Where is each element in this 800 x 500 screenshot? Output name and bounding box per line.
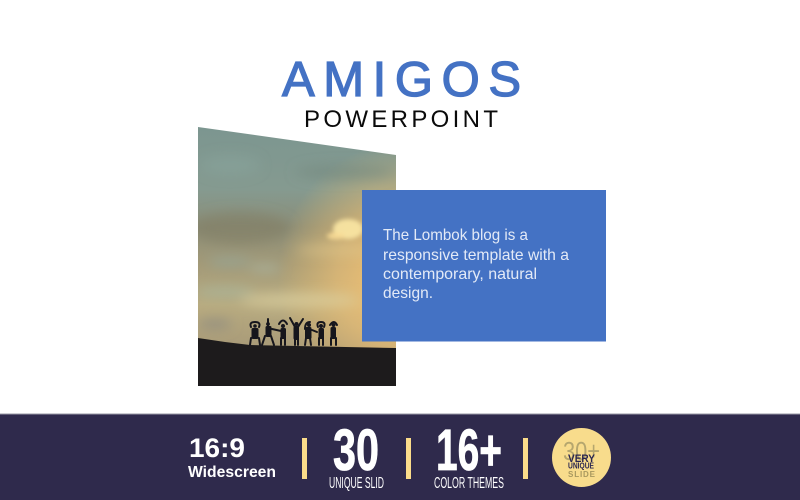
subtitle: POWERPOINT: [304, 106, 498, 133]
panel text: contemporary, natural: [383, 266, 537, 283]
panel text: responsive template with a: [383, 247, 569, 264]
feature: 30 unique slides: UNIQUE SLID: [329, 475, 384, 492]
badge: 30+ very unique slide: [552, 428, 611, 487]
panel text: design.: [383, 285, 433, 302]
feature: 16:9 widescreen: [188, 433, 276, 481]
badge: 30+ very unique slide: 30+: [563, 436, 600, 466]
bottom feature band: [0, 414, 800, 500]
blue text panel: [362, 190, 606, 342]
feature: 16+ color themes: [434, 418, 504, 492]
photo: group silhouettes at sunset: [190, 127, 396, 386]
feature: 16:9 widescreen: 16:9: [189, 433, 245, 463]
badge: 30+ very unique slide: UNIQUE: [568, 460, 594, 470]
feature: 30 unique slides: 30: [333, 418, 379, 483]
badge: 30+ very unique slide: SLIDE: [568, 470, 596, 479]
silhouettes: [250, 318, 337, 345]
divider bar 2: [406, 438, 411, 479]
divider bar 3: [523, 438, 528, 479]
panel text: The Lombok blog is a: [383, 227, 528, 244]
feature: 16+ color themes: 16+: [436, 418, 502, 483]
panel text: [383, 227, 569, 302]
ground: [198, 338, 396, 386]
title: AMIGOS: [282, 53, 521, 107]
badge: 30+ very unique slide: VERY: [568, 453, 596, 465]
feature: 16+ color themes: COLOR THEMES: [434, 475, 504, 492]
divider bar 1: [302, 438, 307, 479]
feature: 16:9 widescreen: Widescreen: [188, 464, 276, 481]
feature: 30 unique slides: [329, 418, 384, 492]
